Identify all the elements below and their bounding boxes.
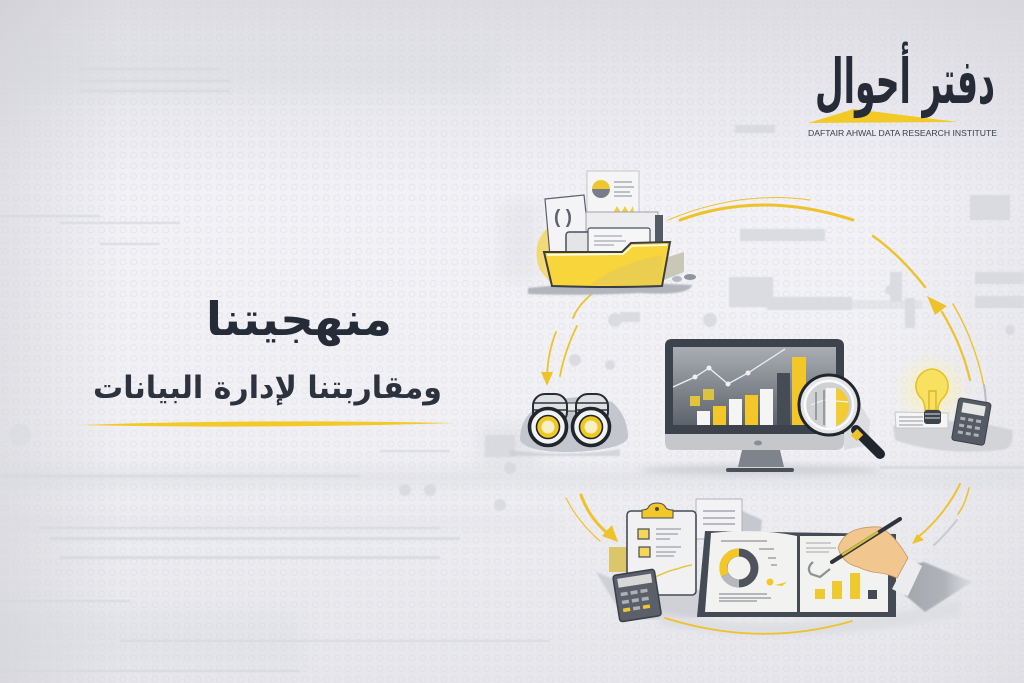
notebook: heart doodle bbox=[809, 562, 830, 577]
icon: binoculars bbox=[510, 394, 628, 456]
barrels bbox=[533, 394, 567, 424]
document with pie bbox=[587, 171, 639, 226]
document with brackets bbox=[545, 195, 590, 256]
stacked papers bbox=[586, 212, 658, 248]
arrow: folder to monitor arc bbox=[668, 198, 853, 220]
notebook: donut chart bbox=[723, 552, 754, 584]
yellow underline bbox=[80, 421, 455, 427]
cycle arrows bbox=[541, 198, 986, 545]
notebook: yellow bars bbox=[815, 573, 877, 599]
hand bbox=[838, 527, 908, 578]
calculator bbox=[951, 398, 991, 446]
backing blob bbox=[520, 397, 628, 452]
monitor stand bbox=[738, 450, 784, 467]
arrow: right arc to bulb bbox=[873, 236, 986, 410]
clipboard bbox=[627, 503, 696, 595]
arrow: right lower arc bbox=[912, 484, 969, 545]
logo: English tagline: DAFTAIR AHWAL DATA RESEARCH INSTITUTE bbox=[808, 129, 997, 138]
title block bbox=[80, 292, 455, 427]
yellow sticky bbox=[609, 547, 629, 572]
document with brackets: ( ) bbox=[554, 207, 572, 228]
bulb bbox=[916, 369, 948, 424]
shirt sleeve bbox=[905, 562, 972, 612]
magnifying glass bbox=[799, 375, 880, 454]
bar chart bbox=[690, 357, 806, 425]
arrow: folder to binoculars bbox=[541, 292, 594, 386]
icon: monitor with charts bbox=[640, 339, 880, 475]
pen bbox=[832, 519, 900, 562]
logo: yellow swoosh bbox=[808, 109, 958, 123]
icon: light bulb, receipt and calculator bbox=[893, 352, 1012, 452]
logo bbox=[808, 41, 997, 138]
heading: subtitle: ومقاربتنا لإدارة البيانات bbox=[93, 370, 442, 406]
right blocks bbox=[740, 229, 825, 241]
icon: folder with documents bbox=[528, 171, 696, 295]
shirt cuff bbox=[892, 558, 922, 596]
left lens bbox=[530, 408, 566, 446]
calculator bbox=[613, 569, 661, 622]
back note bbox=[696, 499, 762, 545]
icon: clipboard, notebook and writing hand bbox=[596, 499, 972, 635]
line chart bbox=[673, 349, 785, 387]
heading: main title: منهجيتنا bbox=[206, 292, 392, 346]
arrow: binoculars to notebook bbox=[566, 495, 618, 542]
yellow folder front bbox=[544, 242, 670, 287]
monitor body bbox=[665, 339, 844, 450]
notebook bbox=[697, 531, 896, 617]
table sheet bbox=[895, 412, 948, 428]
arrow: notebook bottom arc bbox=[665, 618, 852, 634]
folder shadow bbox=[528, 283, 692, 295]
right lens bbox=[572, 408, 610, 446]
screen bbox=[673, 347, 836, 425]
